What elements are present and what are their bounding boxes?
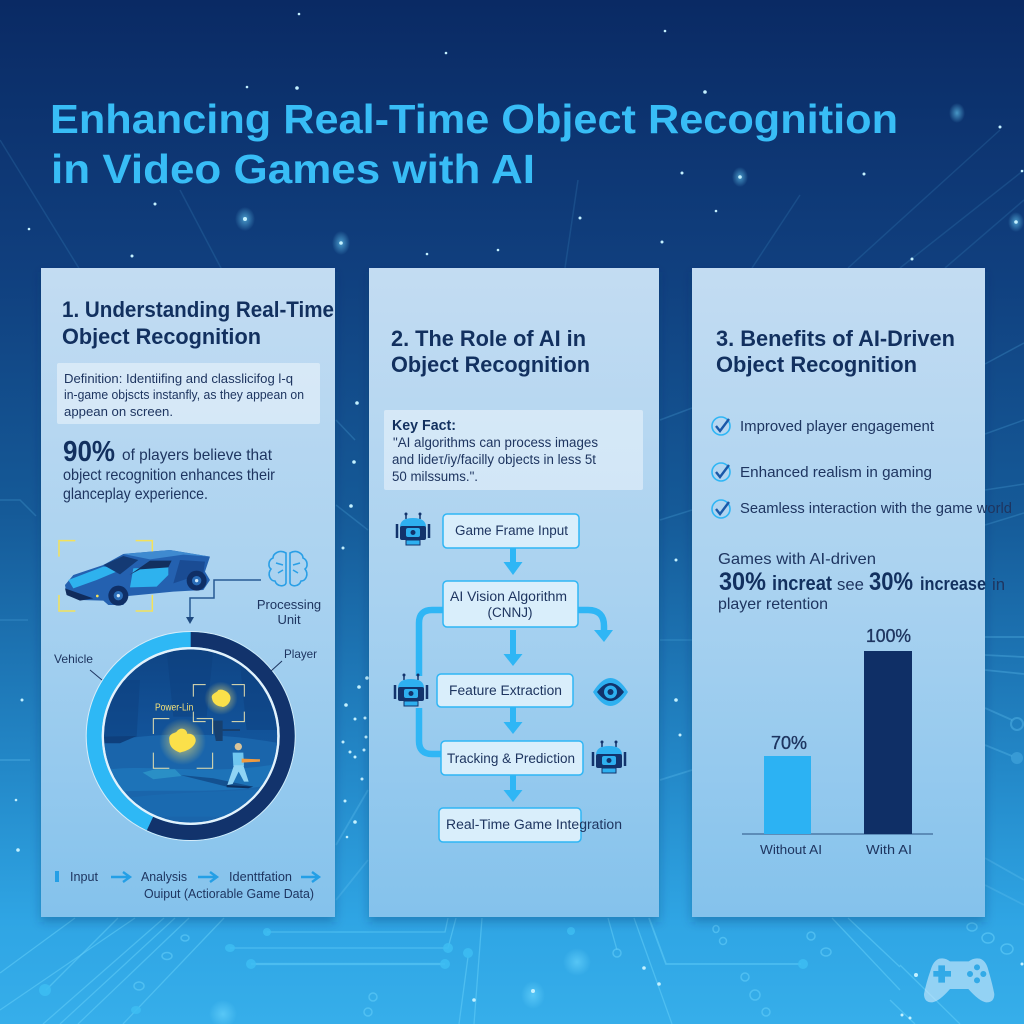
- statistic: 90% of players: object recognition enhances their: [63, 467, 276, 484]
- bar: with AI: With AI: [866, 842, 912, 857]
- key fact box: 50 milssums.".: [392, 469, 478, 484]
- process flow legend: Identtfation: [229, 870, 292, 884]
- bar: with AI: 100%: [866, 626, 911, 646]
- panel: the role of AI: [369, 268, 659, 917]
- title: [50, 96, 898, 192]
- bar chart: [742, 626, 933, 857]
- benefit 1: Improved player engagement: [740, 419, 934, 435]
- label: processing unit: Unit: [277, 612, 301, 627]
- step: AI vision algorithm: AI Vision Algorithm: [450, 589, 567, 604]
- step: AI vision algorithm: [443, 581, 578, 627]
- bar: without AI: [760, 733, 822, 857]
- panel 3 heading: Object Recognition: [716, 352, 917, 377]
- step: game frame input: [443, 514, 579, 548]
- label: processing unit: Processing: [257, 597, 321, 612]
- step: feature extraction: Feature Extraction: [449, 683, 562, 698]
- statistic: 90% of players: 90%: [63, 436, 115, 468]
- panel 1 heading: 1. Understanding Real-Time: [62, 297, 334, 322]
- step: tracking and prediction: [441, 741, 583, 775]
- definition box: [57, 363, 320, 424]
- process flow legend: Analysis: [141, 870, 187, 884]
- icon: robot 2: [395, 674, 427, 706]
- label: player: Player: [284, 647, 317, 661]
- step: tracking and prediction: Tracking & Prediction: [447, 751, 575, 766]
- statistic: 30% retention: [718, 551, 1005, 613]
- step: game frame input: Game Frame Input: [455, 523, 568, 538]
- step: real-time game integration: [439, 808, 622, 842]
- statistic: 30% retention: player retention: [718, 596, 828, 613]
- panel: understanding real-time object recognition: [41, 268, 335, 917]
- panel 2 heading: 2. The Role of AI in: [391, 326, 586, 351]
- label: vehicle: [54, 652, 102, 680]
- step: feature extraction: [437, 674, 573, 707]
- key fact box: and lideτ/iy/facilly objects in less 5t: [392, 452, 596, 467]
- process flow legend: Ouiput (Actiorable Game Data): [144, 887, 314, 901]
- title: in Video Games with AI: [51, 146, 535, 192]
- definition box: in-game objscts instanfly, as they appean on: [64, 387, 304, 402]
- ring chart with game scene: [86, 631, 296, 841]
- statistic: 30% retention: increase: [920, 573, 986, 594]
- statistic: 90% of players: glanceplay experience.: [63, 486, 208, 503]
- panel 2 heading: [391, 326, 590, 377]
- panel: benefits: [692, 268, 1012, 917]
- panel 1 heading: [62, 297, 334, 349]
- title: Enhancing Real-Time Object Recognition: [50, 96, 898, 142]
- icon: robot 1: [397, 512, 429, 545]
- definition box: Definition: Identiifing and classlicifog l-q: [64, 371, 293, 386]
- panel 3 heading: [716, 326, 955, 377]
- icon: robot 3: [593, 740, 625, 773]
- bar: with AI: [864, 626, 912, 857]
- step: AI vision algorithm: (CNNJ): [488, 605, 532, 620]
- label: vehicle: Vehicle: [54, 652, 93, 666]
- definition box: appean on screen.: [64, 404, 173, 419]
- panel 2 heading: Object Recognition: [391, 352, 590, 377]
- key fact box: Key Fact:: [392, 417, 456, 434]
- statistic: 30% retention: 30%: [869, 568, 913, 596]
- bar: without AI: Without AI: [760, 842, 822, 857]
- statistic: 30% retention: increat: [772, 573, 832, 595]
- label: player: [271, 647, 317, 671]
- step: real-time game integration: Real-Time Game Integration: [446, 817, 622, 832]
- statistic: 90% of players: [63, 436, 276, 503]
- benefit 2: Enhanced realism in gaming: [740, 465, 932, 481]
- player figure: [227, 743, 260, 788]
- icon: sports car with detection brackets: [59, 541, 210, 611]
- key fact box: "AI algorithms can process images: [393, 435, 598, 450]
- panel 3 heading: 3. Benefits of AI-Driven: [716, 326, 955, 351]
- process flow legend: [55, 870, 319, 901]
- statistic: 30% retention: in: [992, 575, 1005, 594]
- game scene: [103, 649, 280, 830]
- power-up glow: [159, 718, 206, 765]
- icon: brain: [269, 552, 307, 586]
- key fact box: [384, 410, 643, 490]
- panel 1 heading: Object Recognition: [62, 324, 261, 349]
- icon: game controller: [924, 958, 994, 1002]
- game scene: Power-Lin: [155, 703, 193, 714]
- arrow: processing unit to scene: [186, 580, 261, 624]
- statistic: 30% retention: 30%: [719, 568, 766, 596]
- process flow legend: Input: [70, 870, 99, 884]
- label: processing unit: [257, 597, 321, 627]
- flow connectors and arrows: [419, 548, 613, 802]
- benefit 3: Seamless interaction with the game world: [740, 501, 1012, 517]
- statistic: 90% of players: of players believe that: [122, 447, 273, 464]
- statistic: 30% retention: see: [837, 575, 864, 594]
- icon: eye: [593, 678, 628, 706]
- bar: without AI: 70%: [771, 733, 807, 753]
- statistic: 30% retention: Games with AI-driven: [718, 551, 876, 568]
